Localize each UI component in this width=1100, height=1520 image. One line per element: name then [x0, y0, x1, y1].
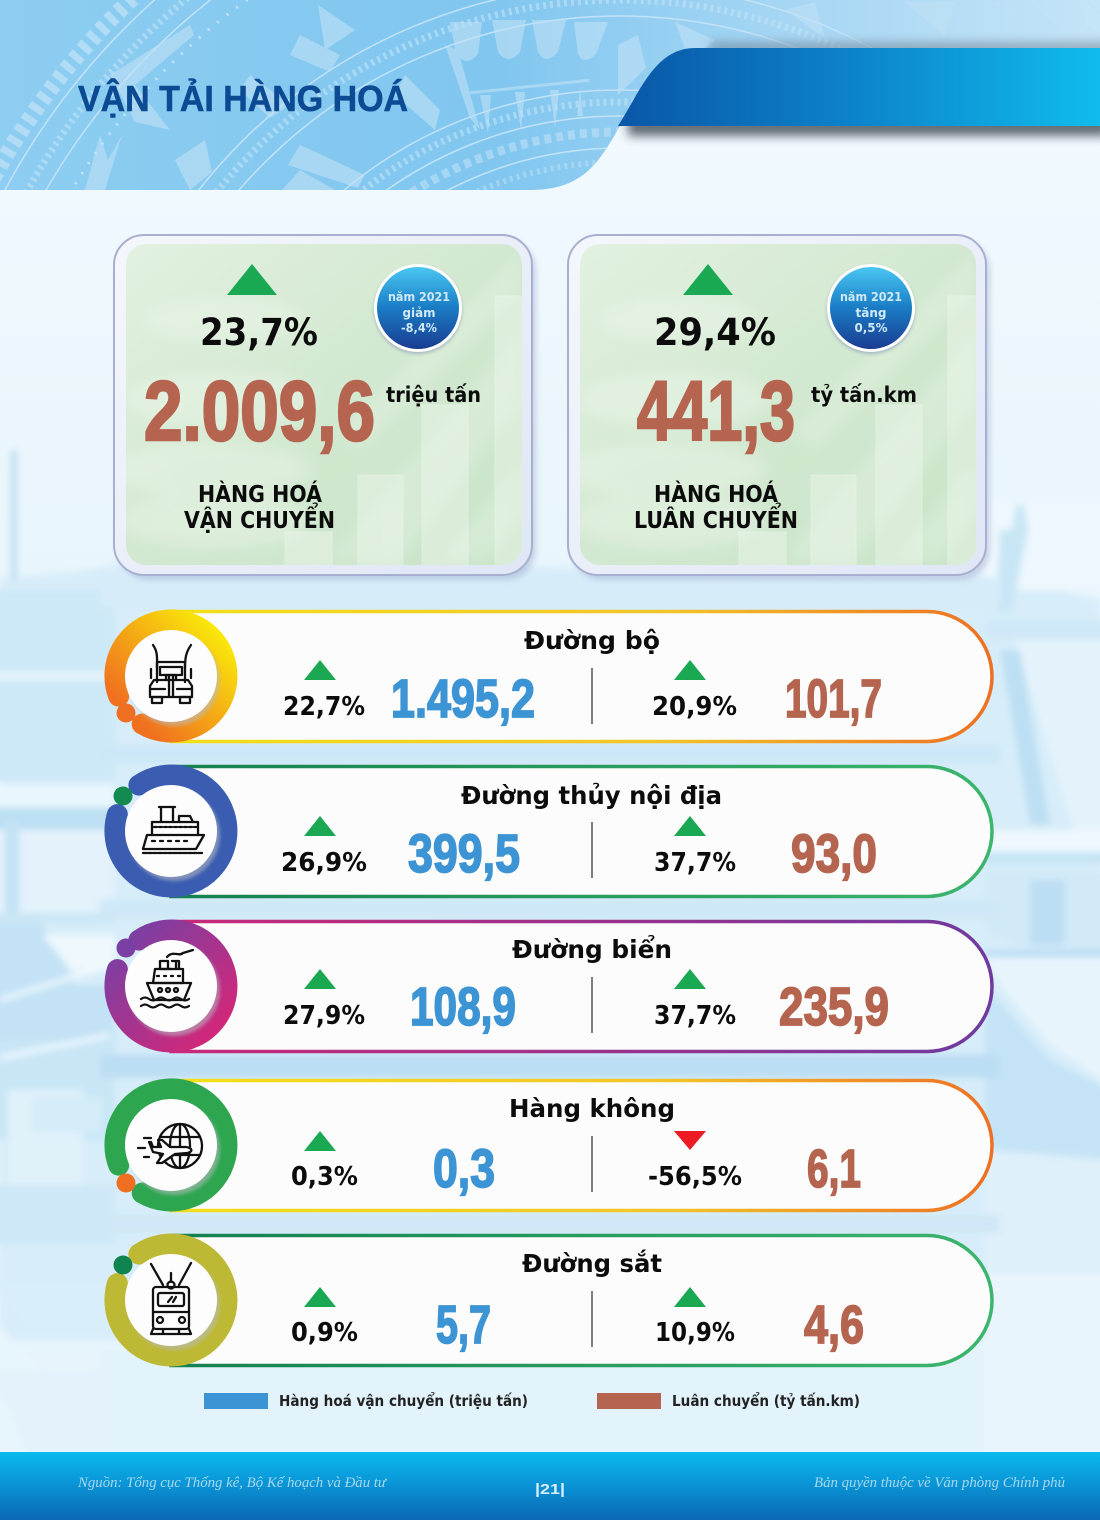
percent: 37,7%	[654, 848, 736, 878]
unit: tỷ tấn.km	[811, 383, 917, 407]
row title: Đường bộ	[524, 626, 660, 655]
up arrow	[304, 1131, 336, 1151]
copyright: Bản quyền thuộc về Văn phòng Chính phủ	[814, 1475, 1065, 1491]
source note: Nguồn: Tổng cục Thống kê, Bộ Kế hoạch và Đầu tư	[77, 1475, 388, 1491]
row title: Đường thủy nội địa	[461, 781, 722, 810]
up arrow	[304, 660, 336, 680]
percent: 37,7%	[654, 1001, 736, 1031]
ring icon: truck	[115, 620, 227, 732]
up arrow	[304, 1287, 336, 1307]
badge: 2021 comparison: -8,4%	[401, 320, 437, 335]
up arrow	[304, 816, 336, 836]
header ribbon	[618, 42, 1100, 136]
label	[634, 480, 798, 534]
value: 101,7	[785, 669, 882, 729]
percent: 22,7%	[283, 692, 365, 722]
label: LUÂN CHUYỂN	[634, 503, 798, 534]
up arrow	[674, 969, 706, 989]
background photo: port and bridge	[0, 450, 1100, 1460]
badge: 2021 comparison: năm 2021	[840, 289, 902, 304]
badge: 2021 comparison: 0,5%	[854, 320, 888, 335]
label	[184, 480, 335, 534]
ring icon: ship	[115, 930, 227, 1042]
percent: 0,9%	[291, 1318, 358, 1348]
footer band	[0, 1452, 1100, 1520]
badge: 2021 comparison: tăng	[856, 305, 886, 320]
panel: hàng hoá vận chuyển	[110, 235, 536, 580]
row: đường sắt	[114, 1236, 992, 1366]
percent: 20,9%	[652, 692, 737, 722]
value: 6,1	[807, 1139, 861, 1199]
label: HÀNG HOÁ	[198, 480, 322, 508]
change percent: 29,4%	[654, 311, 776, 354]
legend	[204, 1391, 860, 1410]
row: đường thủy nội địa	[114, 766, 992, 896]
up arrow	[227, 264, 277, 295]
up arrow	[304, 969, 336, 989]
label: VẬN CHUYỂN	[184, 503, 335, 534]
value: 0,3	[433, 1139, 495, 1199]
legend swatch: luân chuyển	[597, 1393, 661, 1409]
main value: 441,3	[637, 364, 795, 458]
percent: 26,9%	[281, 848, 367, 878]
up arrow	[674, 816, 706, 836]
label: HÀNG HOÁ	[654, 480, 778, 508]
value: 108,9	[410, 977, 516, 1037]
percent: 0,3%	[291, 1162, 358, 1192]
header band: bronze drum pattern	[0, 0, 1100, 190]
value: 5,7	[436, 1295, 491, 1355]
row title: Đường biển	[512, 934, 672, 964]
percent: 27,9%	[283, 1001, 365, 1031]
ring icon: train	[114, 1244, 227, 1356]
panel: hàng hoá luân chuyển	[564, 235, 990, 580]
legend label: luân chuyển: Luân chuyển (tỷ tấn.km)	[672, 1391, 860, 1410]
row: đường biển	[115, 922, 992, 1052]
row: đường bộ	[115, 612, 992, 742]
percent: 10,9%	[655, 1318, 735, 1348]
up arrow	[674, 1287, 706, 1307]
value: 235,9	[779, 977, 889, 1037]
value: 4,6	[804, 1295, 864, 1355]
badge: 2021 comparison	[827, 264, 915, 354]
ring icon: ferry	[114, 775, 227, 887]
legend swatch: vận chuyển	[204, 1393, 268, 1409]
value: 93,0	[791, 824, 877, 884]
title: VẬN TẢI HÀNG HOÁ	[78, 77, 408, 119]
change percent: 23,7%	[200, 311, 318, 354]
page number: |21|	[535, 1481, 565, 1498]
unit: triệu tấn	[386, 383, 481, 407]
main value: 2.009,6	[144, 364, 375, 458]
up arrow	[683, 264, 733, 295]
row title: Hàng không	[509, 1094, 675, 1123]
up arrow	[674, 660, 706, 680]
down arrow	[674, 1131, 706, 1150]
percent: -56,5%	[648, 1162, 742, 1192]
row title: Đường sắt	[522, 1249, 662, 1278]
ring icon: plane and globe	[115, 1089, 227, 1201]
badge: 2021 comparison: năm 2021	[388, 289, 450, 304]
legend label: vận chuyển: Hàng hoá vận chuyển (triệu tấn)	[279, 1391, 528, 1410]
value: 399,5	[408, 824, 520, 884]
value: 1.495,2	[391, 669, 535, 729]
badge: 2021 comparison: giảm	[402, 305, 436, 320]
badge: 2021 comparison	[374, 264, 462, 354]
row: hàng không	[115, 1080, 992, 1210]
